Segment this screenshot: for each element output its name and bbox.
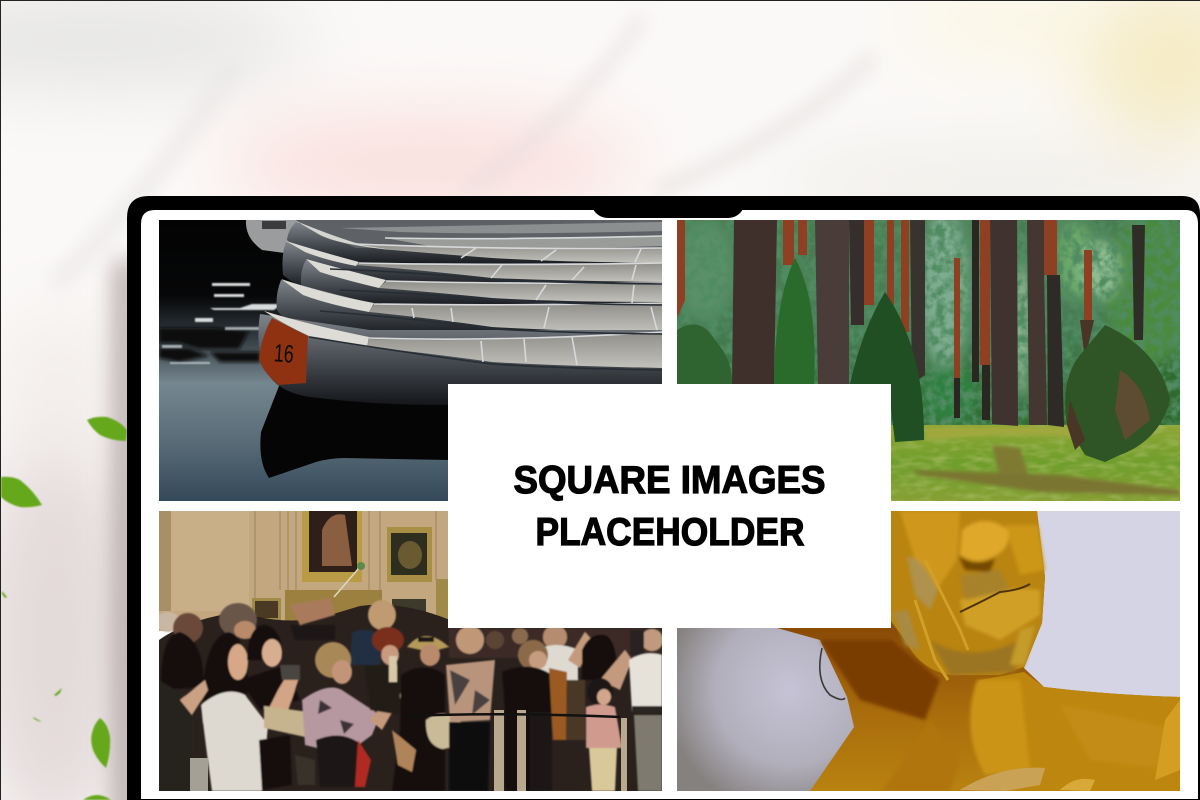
photo: pine forest [675, 210, 1195, 501]
title card [448, 384, 891, 628]
dark pine trunks [732, 220, 1145, 427]
decorative green leaves [1, 417, 127, 800]
camera notch [593, 209, 743, 218]
stanchion posts [190, 710, 627, 791]
title text: SQUARE IMAGES [514, 459, 826, 502]
red pine trunks [677, 220, 1092, 378]
device frame [127, 196, 1200, 800]
gallery paintings [252, 511, 448, 623]
photo: canoes on dark water [159, 220, 662, 501]
canoe bow number [259, 318, 308, 385]
background heads and arms [449, 625, 663, 680]
title text [514, 459, 826, 554]
photo: gold painted figure [677, 511, 1180, 791]
canoe bow number: 16 [273, 339, 295, 369]
photo: crowd in gallery [156, 511, 663, 791]
title text: PLACEHOLDER [536, 511, 805, 554]
